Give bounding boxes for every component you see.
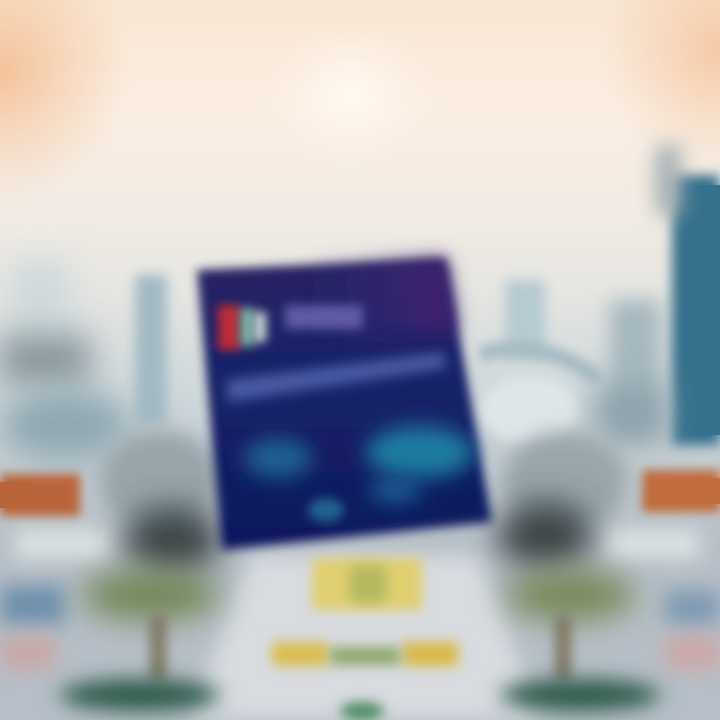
right tower xyxy=(655,145,720,445)
card xyxy=(197,258,492,550)
mid-ground domes xyxy=(0,349,665,460)
card subtitle band xyxy=(226,352,446,402)
yellow plaza features xyxy=(272,558,458,720)
orange railings xyxy=(0,470,720,516)
card title block xyxy=(285,305,363,329)
card map xyxy=(244,426,474,522)
distant skyline xyxy=(0,260,660,440)
lower plaza ground xyxy=(0,530,720,720)
left grey globe xyxy=(100,430,220,574)
flag emblem xyxy=(218,305,266,350)
palm trees xyxy=(60,569,660,711)
right grey globe xyxy=(497,432,627,569)
